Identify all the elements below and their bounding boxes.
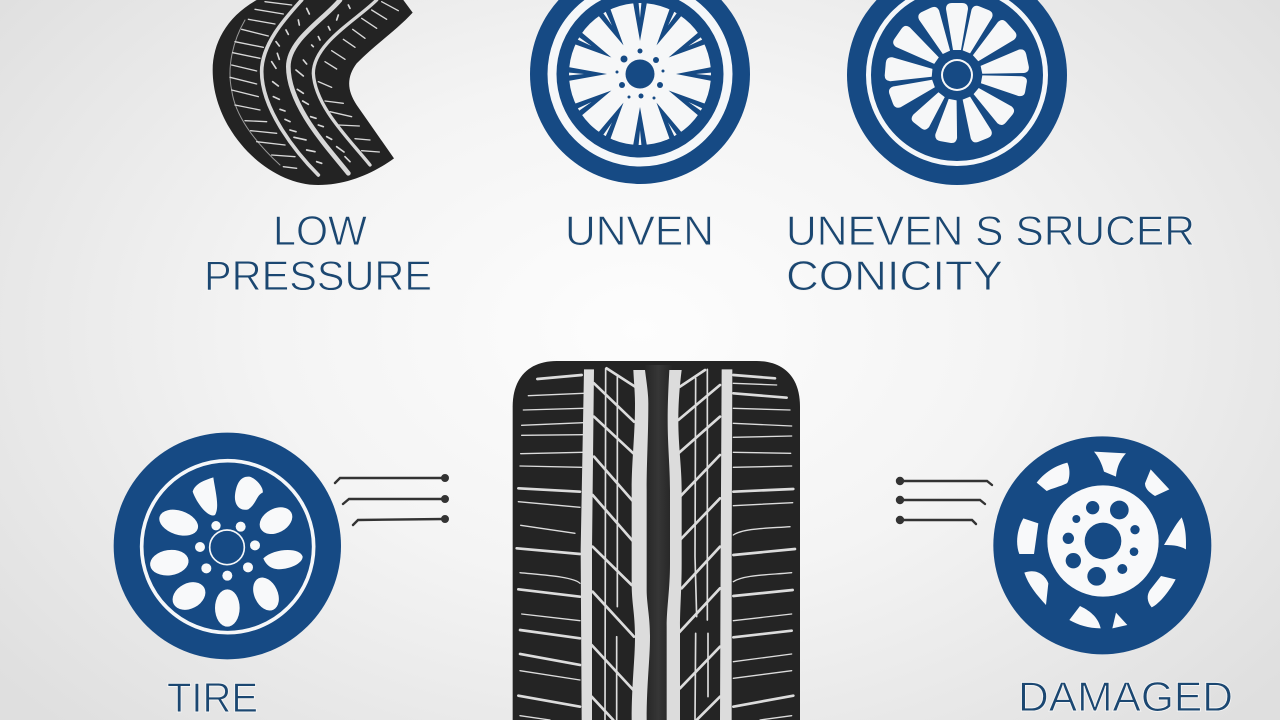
label: UNEVEN S SRUCER CONICITY [786, 207, 1195, 299]
icon: damaged wheel [993, 436, 1211, 654]
icon: curved tire tread, low pressure [213, 0, 413, 185]
label: UNVEN: UNVEN [565, 207, 714, 254]
label: DAMAGED: DAMAGED [1018, 673, 1233, 720]
icon: wheel with wide petals, uneven conicity [847, 0, 1067, 185]
motion lines: left wheel [335, 475, 448, 525]
label: LOW PRESSURE: LOW [273, 207, 367, 254]
label: UNEVEN S SRUCER CONICITY: CONICITY [786, 252, 1003, 299]
icon: wheel with thin spokes, uneven [530, 0, 750, 184]
label: UNEVEN S SRUCER CONICITY: UNEVEN S SRUCER [786, 207, 1195, 254]
label: LOW PRESSURE: PRESSURE [204, 252, 432, 299]
icon: center tire tread [513, 361, 800, 720]
label: LOW PRESSURE [204, 207, 432, 299]
label: TIRE: TIRE [167, 674, 258, 720]
motion lines: right wheel [897, 478, 992, 524]
icon: wheel with petal cut-outs, tire [114, 433, 341, 659]
